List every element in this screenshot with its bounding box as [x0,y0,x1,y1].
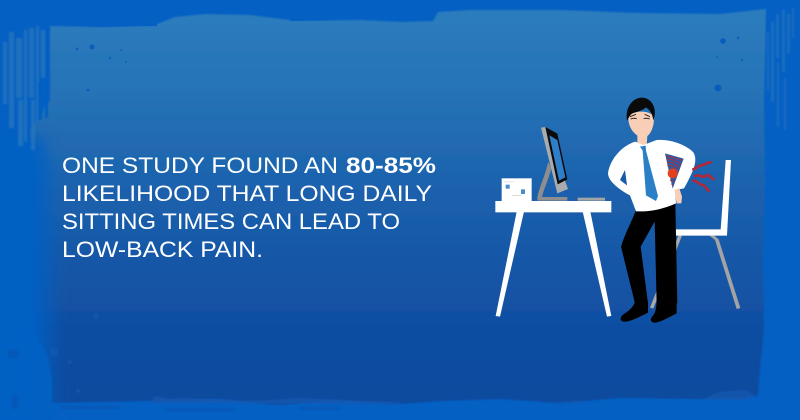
main statement text [62,153,436,262]
main statement text: ONE STUDY FOUND AN [62,153,338,178]
shoes [621,302,648,322]
keyboard [578,198,605,201]
main statement text: LIKELIHOOD THAT LONG DAILY [62,181,432,206]
hair [627,98,655,121]
main statement text: LOW-BACK PAIN. [62,237,263,262]
right edge streaks [767,8,794,130]
shirt [608,140,695,211]
hand [674,188,682,203]
neck [637,132,648,145]
ink speckles [76,37,743,91]
desk [495,201,611,317]
head [628,112,654,137]
main statement text: SITTING TIMES CAN LEAD TO [62,209,400,234]
arm gap [620,170,627,185]
man [608,98,713,323]
bottom rough edge [50,313,756,404]
left edge streaks [3,26,48,150]
necktie [640,146,658,201]
chair [650,160,740,309]
pain squiggles [693,162,713,191]
illustration: office worker with back pain [495,98,740,323]
trousers [621,202,677,303]
bottom dark patches [8,350,340,411]
paper box on desk [502,178,532,201]
computer monitor [537,127,568,201]
pain area [665,153,684,189]
highlighted statistic: 80-85% [346,153,436,178]
eyes and brows [630,114,650,119]
left fade into the border [0,125,62,420]
top brush strokes [60,17,360,27]
